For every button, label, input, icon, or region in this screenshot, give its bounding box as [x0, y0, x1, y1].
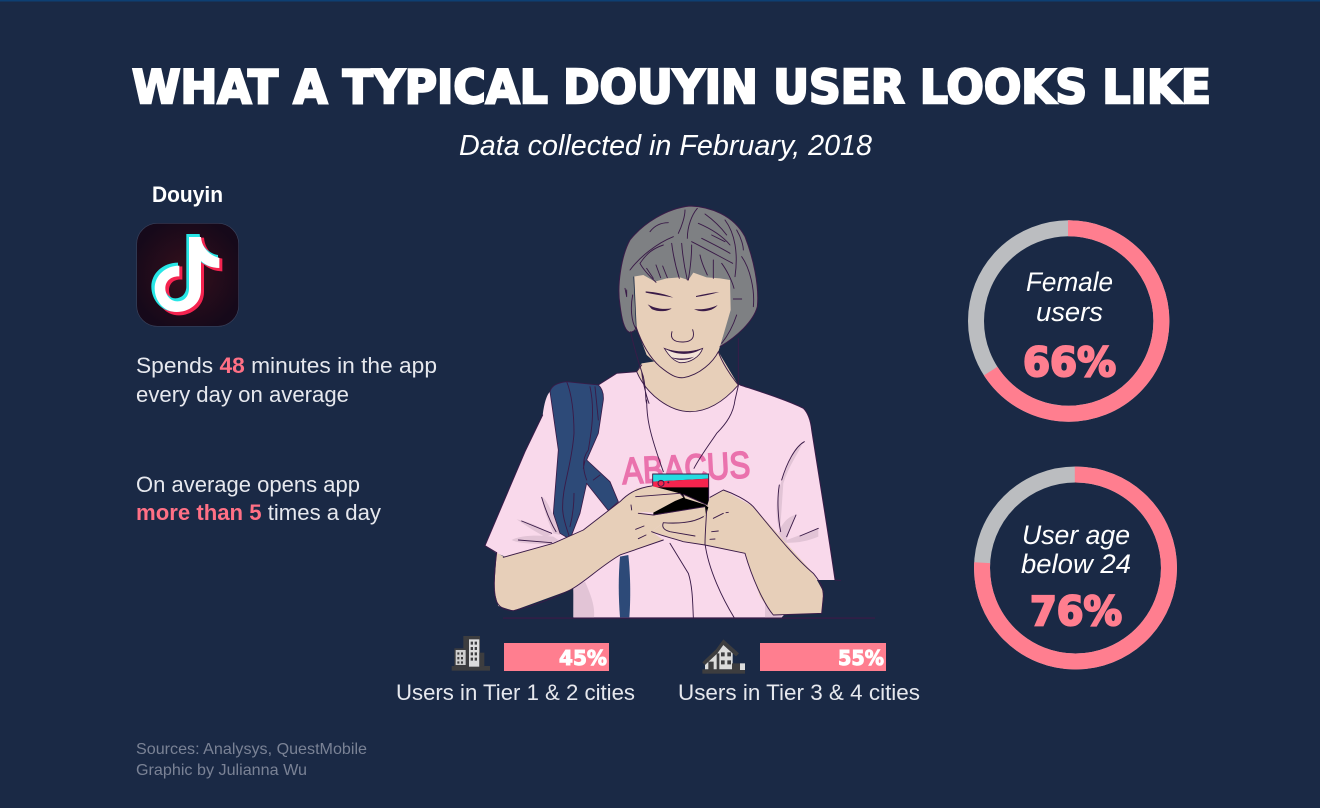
- neck and chest: [637, 352, 738, 412]
- bar value: 45%: [559, 646, 607, 670]
- illustration: girl looking at phone: [485, 206, 841, 617]
- subtitle: Data collected in February, 2018: [459, 130, 872, 162]
- donut: female users: [976, 228, 1161, 414]
- label: tier 1 and 2 cities: Users in Tier 1 & 2 cities: [396, 680, 635, 705]
- sources and credit: [136, 741, 367, 779]
- earphone cords from ears: [631, 332, 738, 403]
- donut label: User age: [1022, 520, 1130, 550]
- donut value: 66%: [1023, 340, 1116, 386]
- label: tier 3 and 4 cities: Users in Tier 3 & 4 cities: [678, 680, 920, 705]
- text: app opens per day: more than 5 times a day: [136, 500, 381, 525]
- phone: [638, 474, 709, 522]
- donut value: 76%: [1030, 589, 1122, 635]
- sources and credit: Graphic by Julianna Wu: [136, 762, 307, 779]
- earphone wires: [647, 400, 735, 617]
- bar: tier 3 and 4 cities: [760, 643, 886, 671]
- icon: city buildings: [452, 636, 490, 671]
- sources and credit: Sources: Analysys, QuestMobile: [136, 741, 367, 758]
- face: [634, 272, 732, 378]
- text: minutes per day: every day on average: [136, 382, 349, 407]
- text: minutes per day: [136, 353, 437, 407]
- text: app opens per day: [136, 472, 381, 525]
- t-shirt: [485, 372, 835, 617]
- hands and arms: [494, 486, 823, 615]
- icon: Douyin app logo: [137, 223, 239, 326]
- text: minutes per day: Spends 48 minutes in the app: [136, 353, 437, 378]
- donut label: [1026, 267, 1113, 327]
- ground line: [503, 618, 875, 619]
- donut: user age below 24: [982, 474, 1169, 662]
- donut label: Female: [1026, 267, 1113, 297]
- donut label: [1021, 520, 1131, 579]
- app name: Douyin: [152, 182, 223, 207]
- donut label: users: [1036, 297, 1103, 327]
- icon: house: [702, 639, 745, 674]
- title: WHAT A TYPICAL DOUYIN USER LOOKS LIKE: [132, 60, 1211, 114]
- backpack strap: [550, 382, 618, 539]
- donut label: below 24: [1021, 549, 1131, 579]
- text: app opens per day: On average opens app: [136, 472, 360, 497]
- bar value: 55%: [838, 646, 884, 670]
- shirt lettering: ABACUS: [621, 443, 751, 492]
- bar: tier 1 and 2 cities: [504, 643, 609, 671]
- hair: [619, 206, 758, 347]
